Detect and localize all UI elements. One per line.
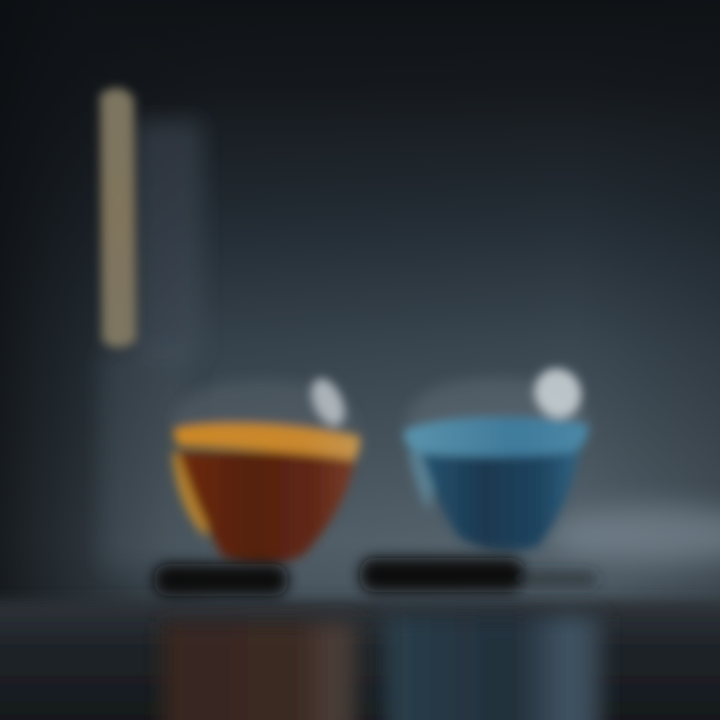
liquid body: [178, 452, 356, 564]
blue bowl: [403, 361, 590, 551]
liquid surface: [174, 422, 360, 460]
light wedge left of blue body: [408, 452, 440, 512]
liquid body: [420, 448, 580, 551]
tan stripe on cylinder: [100, 88, 136, 348]
orange bowl: [172, 373, 360, 564]
bowl reflections: [162, 616, 603, 720]
liquid surface: [403, 416, 588, 456]
highlight: [527, 361, 589, 425]
yellow edge glow: [172, 450, 210, 538]
floor: [0, 600, 720, 720]
glass rim: [404, 378, 590, 425]
graduated cylinder: [100, 88, 203, 570]
light glow on right side of table: [550, 507, 720, 563]
dark shadows under the bowls: [154, 558, 596, 596]
glass rim: [172, 380, 358, 430]
highlight: [305, 373, 351, 431]
